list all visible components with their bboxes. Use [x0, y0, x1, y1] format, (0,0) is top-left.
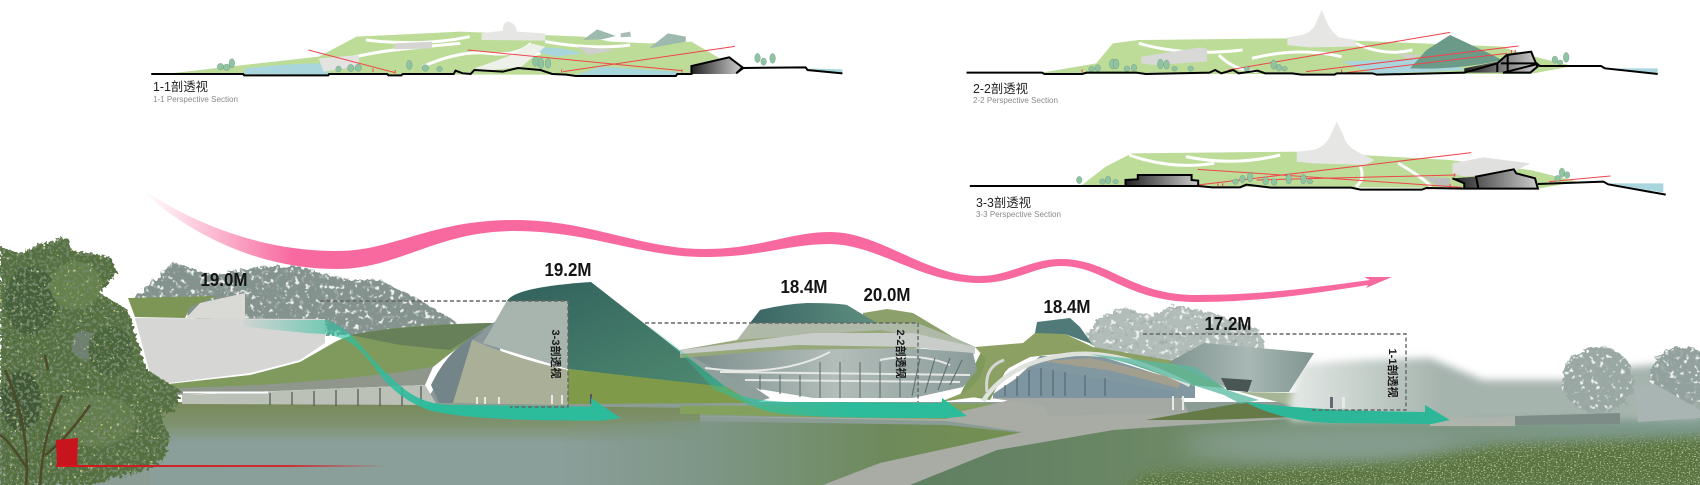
landscape ground: [0, 392, 1700, 485]
height 18.4M right: 18.4M: [1044, 297, 1090, 317]
section 1-1 drawing: [151, 22, 842, 76]
left cut building: [1126, 175, 1198, 186]
buildings and dome: [1141, 10, 1422, 65]
background trees left: [133, 263, 456, 335]
dashed section frame 2-2: [645, 323, 918, 402]
ground section line: [151, 57, 842, 76]
label 3-3 section: 3-3剖透视: [549, 330, 563, 378]
glass curtain wall: [182, 385, 437, 405]
building backing surfaces: [425, 322, 1195, 406]
cave entrance: [431, 330, 485, 403]
misty lower lawn left: [150, 442, 850, 485]
glass hall: [993, 367, 1175, 398]
tree branches: [0, 355, 90, 485]
white arch: [983, 354, 1190, 401]
lower white volume: [135, 318, 325, 385]
section 2-2 title: 2-2剖透视: [973, 81, 1028, 96]
logo mark: [56, 438, 386, 467]
green site plane: [170, 32, 743, 75]
inner arch line: [987, 360, 1004, 392]
cave interior: [425, 322, 510, 402]
teal flow arrow 1: [244, 320, 621, 421]
centre building: [680, 303, 1314, 404]
pink wind arrow: [141, 188, 1392, 302]
tree canopy: [0, 237, 180, 485]
lawn strip under building: [680, 403, 1105, 420]
road and plaza: [680, 400, 1290, 485]
label 1-1 section: 1-1剖透视: [1386, 349, 1400, 397]
sight lines: [1082, 32, 1519, 73]
right water: [1608, 183, 1663, 193]
plaza surface: [990, 396, 1190, 416]
height 20.0M: 20.0M: [864, 285, 910, 305]
teal flow arrow 2: [645, 323, 967, 418]
link lawn backing: [960, 346, 1030, 400]
arch soffit: [1042, 358, 1182, 388]
left building: [128, 282, 752, 406]
section 1-1 subtitle: 1-1 Perspective Section: [153, 95, 238, 104]
right cut building: [1452, 169, 1538, 189]
ground section line: [970, 169, 1666, 195]
second dome: [863, 309, 975, 347]
dashed section frame 3-3: [320, 301, 568, 407]
cut building: [1464, 52, 1537, 73]
upper lawn left: [150, 402, 700, 445]
trees: [1076, 168, 1570, 185]
mist over hill: [1180, 427, 1460, 463]
grass wedge: [1146, 402, 1290, 420]
sight lines: [308, 46, 735, 73]
misty hill: [1290, 358, 1700, 420]
green cone: [1410, 35, 1502, 69]
trees: [1089, 52, 1569, 72]
grey band: [680, 333, 975, 354]
label 2-2 section: 2-2剖透视: [894, 330, 908, 378]
slope near arrow: [1240, 392, 1480, 420]
hall backing: [995, 356, 1195, 398]
dashed section frame 1-1: [1143, 334, 1406, 410]
green site plane: [1082, 152, 1577, 188]
white paths: [1139, 43, 1412, 72]
canopy band: [175, 367, 433, 395]
section 1-1 title: 1-1剖透视: [153, 79, 208, 94]
green mountain 19.2M: [483, 282, 727, 388]
section 3-3 title: 3-3剖透视: [976, 195, 1031, 210]
main dome: [750, 303, 877, 323]
dark dome right: [1035, 318, 1092, 344]
upper white volume: [186, 293, 245, 319]
ground section line: [967, 52, 1658, 75]
white paths: [1129, 155, 1431, 187]
right cut building: [691, 57, 741, 74]
glass fins: [760, 358, 962, 398]
upper green roof: [128, 296, 217, 318]
water: [243, 47, 677, 75]
right water: [807, 68, 842, 74]
building mullions: [1221, 378, 1252, 392]
height 19.2M: 19.2M: [544, 260, 592, 280]
glass drum: [693, 348, 977, 398]
tree: [1562, 347, 1634, 413]
grey cone face: [472, 301, 568, 369]
sight lines: [1198, 153, 1611, 187]
textured foreground grass: [1120, 436, 1700, 485]
misty hill and trees right: [1290, 347, 1700, 425]
section 2-2 drawing: [967, 10, 1658, 75]
buildings and dome: [1297, 122, 1530, 187]
base soil: [0, 402, 1700, 485]
water: [1342, 58, 1469, 74]
height 18.4M centre: 18.4M: [780, 277, 828, 297]
red emblem: [56, 438, 78, 466]
dark green fold: [350, 323, 493, 350]
people: [476, 394, 1345, 410]
hall mullions: [1005, 368, 1105, 396]
section 2-2 subtitle: 2-2 Perspective Section: [973, 96, 1058, 105]
light cone front: [453, 340, 568, 405]
white paths: [328, 37, 630, 71]
background trees behind 17.2M: [1085, 305, 1265, 365]
section 3-3 drawing: [970, 122, 1666, 195]
green link roof: [940, 333, 1225, 402]
section 3-3 subtitle: 3-3 Perspective Section: [976, 210, 1061, 219]
drum backing: [650, 350, 770, 406]
drum balcony lines: [705, 352, 970, 382]
green roof hill: [150, 323, 493, 392]
right water: [1603, 68, 1658, 74]
lower lawn patch: [560, 421, 1023, 485]
small building right: [1634, 384, 1700, 422]
green site plane: [1042, 38, 1573, 74]
angular grey building: [1169, 343, 1314, 392]
road to the right: [1430, 416, 1520, 426]
white strip: [183, 392, 268, 394]
light cone: [737, 323, 975, 347]
foreground tree: [0, 237, 180, 485]
red rule: [56, 465, 386, 467]
height 17.2M: 17.2M: [1204, 314, 1252, 334]
right hill: [905, 416, 1700, 485]
trees: [217, 53, 775, 72]
crowd: [1515, 413, 1620, 425]
green lower roof: [568, 369, 752, 404]
green left shoulder: [680, 330, 975, 358]
height 19.0M: 19.0M: [200, 270, 248, 290]
teal roof over arch: [1090, 354, 1259, 404]
mullions: [270, 386, 421, 406]
tree far right: [1650, 347, 1700, 403]
teal flow arrow 3: [1245, 402, 1450, 424]
buildings: [319, 22, 686, 72]
